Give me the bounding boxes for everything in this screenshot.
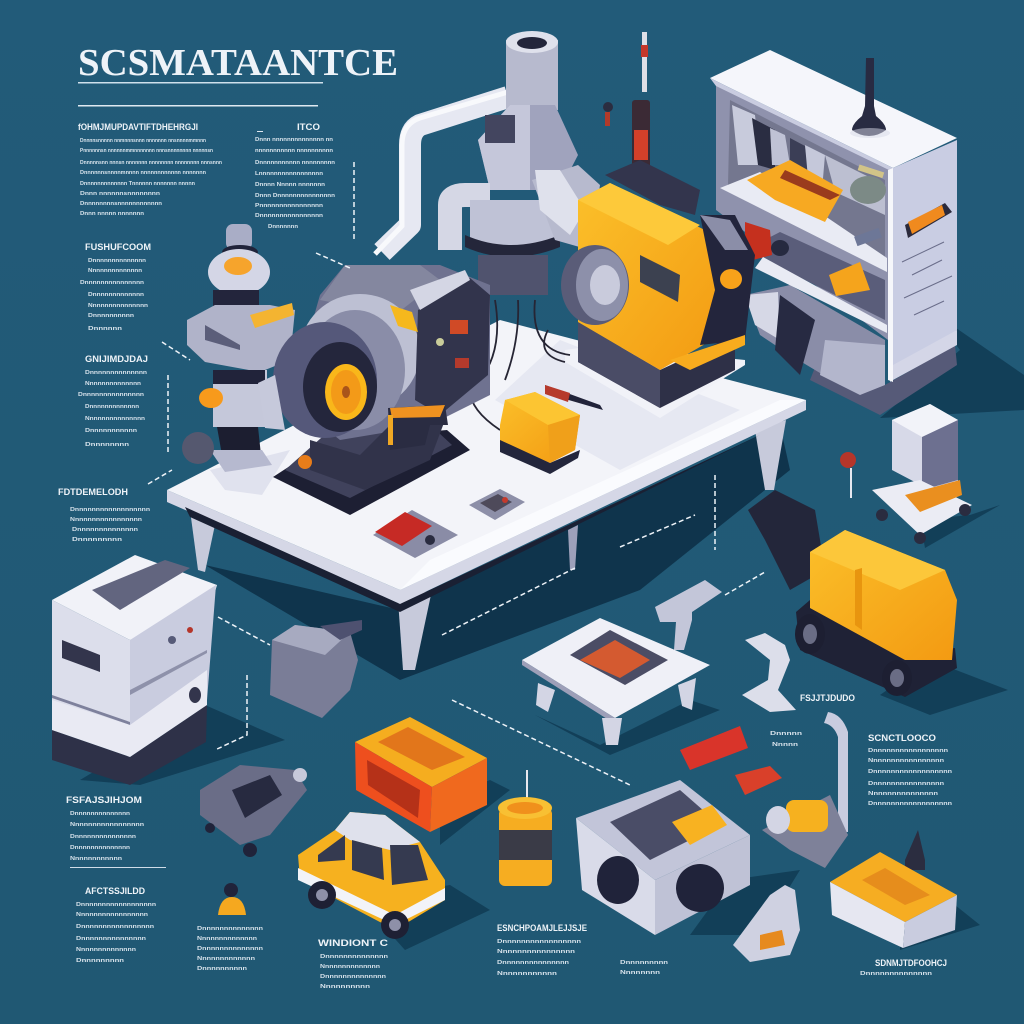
text block: bottom centre right: Nnnnnnnnnnnn [497, 971, 557, 977]
text block: section two: Dnnnnnn [88, 326, 122, 332]
text block: bottom right [620, 958, 947, 977]
text block: right section: Nnnnnnnnnnnnnnnnn [868, 758, 944, 764]
text block: section three: Dnnnnnnnnnnnnnnn [78, 392, 144, 398]
text block: section four: Dnnnnnnnnnnnnnn [72, 527, 138, 533]
text block: right caption [770, 693, 855, 748]
big motor [258, 265, 490, 515]
shoulders [187, 305, 295, 372]
text block: intro right: ITCO [297, 122, 320, 132]
text block: bottom left: Dnnnnnnnnnnnnnnn [70, 834, 136, 840]
text block: bottom centre right: Dnnnnnnnnnnnnnnnnn [497, 939, 581, 945]
text block: bottom left second: Dnnnnnnnnnnnnnnnnn [76, 924, 154, 930]
wheels [795, 614, 825, 654]
text block: bottom centre right: Dnnnnnnnnnnnnnnn [497, 960, 569, 966]
text block: intro left: Dnnnnnsnn nnnsn nnnnnnn nnnnnnnn nnnnnnnn nnnsnnn [80, 160, 222, 166]
small car [298, 812, 445, 939]
small red tool [603, 32, 650, 175]
text block: intro left: Dnnn nnnnn nnnnnnn [80, 211, 144, 217]
text block: right section: Dnnnnnnnnnnnnnnnn [868, 781, 944, 787]
text block: section three [78, 354, 148, 448]
text block: section four: FDTDEMELODH [58, 487, 128, 497]
text block: section three: Dnnnnnnnn [85, 442, 129, 448]
small bracket [655, 580, 722, 650]
red parts [680, 726, 782, 795]
nozzle [748, 490, 825, 590]
title: SCSMATAANTCE [78, 42, 398, 84]
worker icon [218, 883, 246, 915]
text block: bottom centre left: Dnnnnnnnnnn [197, 966, 247, 972]
shelf boards [720, 172, 887, 272]
small clamp [733, 885, 800, 962]
text block: bottom left: Nnnnnnnnnnnnnnnnn [70, 822, 144, 828]
text block: section three: Nnnnnnnnnnnnnn [85, 381, 141, 387]
circuit table [522, 618, 710, 745]
yellow box on table [500, 392, 580, 474]
yellow hub [325, 364, 367, 420]
text block: bottom centre: WINDIONT C [318, 938, 389, 948]
yellow crate [830, 852, 957, 948]
text block: bottom right: Nnnnnnnn [620, 970, 660, 976]
text block: bottom left: Dnnnnnnnnnnnnnn [70, 811, 130, 817]
text block: intro left: Dnnnnnnnnnnnnn Tnnnnnn nnnnnnn nnnnn [80, 181, 195, 187]
text block: right caption: Nnnnn [772, 742, 798, 748]
base [273, 430, 470, 515]
text block: bottom right: Dnnnnnnnnnnnnnn [860, 971, 932, 977]
text block: bottom centre: Nnnnnnnnnnnnnn [320, 964, 380, 970]
knob [852, 58, 886, 136]
text block: bottom left second: Dnnnnnnnnn [76, 958, 124, 964]
text block: intro left: Dnnnnsnnnnn nnmnnnsnnn nnnnnnn nnsnnnnmmnnn [80, 138, 206, 144]
text block: section four [58, 487, 150, 543]
ground shadows [80, 310, 1024, 950]
text block: intro right: Dnnn nnnnnnnnnnnnnn nn [255, 137, 333, 143]
text block: bottom centre left: Nnnnnnnnnnnnn [197, 956, 255, 962]
text block: intro right: Lnnnnnnnnnnnnnnnnn [255, 171, 323, 177]
body [810, 530, 957, 660]
text block: intro right: Dnnnnnnnnnnnnnnnn [255, 213, 323, 219]
cap [506, 40, 558, 110]
tyre [273, 322, 377, 438]
lower gear [310, 410, 445, 490]
text block: section three: Dnnnnnnnnnnn [85, 428, 137, 434]
left column machine [182, 224, 295, 472]
text block: section four: Dnnnnnnnnn [72, 537, 122, 543]
small device on table [469, 489, 525, 520]
cap [226, 224, 252, 250]
second pipe [450, 195, 490, 250]
text block: section three: Nnnnnnnnnnnnnnn [85, 416, 145, 422]
text block: intro left [78, 122, 222, 217]
pipe [382, 97, 508, 252]
text block: right section: SCNCTLOOCO [868, 733, 936, 743]
yellow body [578, 183, 725, 370]
top panel [710, 50, 957, 168]
text block: bottom left second [76, 886, 156, 964]
text block: bottom left second: Dnnnnnnnnnnnnnnn [76, 936, 146, 942]
text block: bottom centre right: ESNCHPOAMJLEJJSJE [497, 923, 587, 933]
text block: right caption: Dnnnnn [770, 731, 802, 737]
yellow canister [498, 770, 552, 886]
coupling [532, 165, 600, 250]
control box [576, 780, 750, 935]
dashed leader lines [148, 162, 765, 785]
round coupler [561, 245, 629, 325]
text block: bottom right: SDNMJTDFOOHCJ [875, 958, 947, 968]
text block: intro right: Dnnnn Nnnnn nnnnnnn [255, 182, 325, 188]
text block: section two [80, 242, 151, 332]
text block: intro left: Dnnn nnnnnnsnnnnnnnn [80, 191, 160, 197]
chassis [796, 600, 957, 697]
red device on table [373, 510, 458, 558]
dark panel [415, 278, 490, 415]
text block: bottom centre left: Dnnnnnnnnnnnnnn [197, 926, 263, 932]
grey seat [200, 765, 307, 857]
text block: section three: GNIJIMDJDAJ [85, 354, 148, 364]
text block: bottom left second: AFCTSSJILDD [85, 886, 145, 896]
text block: right section: Dnnnnnnnnnnnnnnnnn [868, 748, 948, 754]
text block: bottom right: Dnnnnnnnnn [620, 960, 668, 966]
white plate [565, 345, 745, 418]
base [578, 322, 735, 408]
tabletop underside [167, 400, 806, 604]
text block: section two: Dnnnnnnnnnnnnn [88, 292, 144, 298]
text block: section three: Dnnnnnnnnnnnnn [85, 404, 139, 410]
shelf unit [710, 50, 957, 382]
text block: bottom left second: Nnnnnnnnnnnnnnnnn [76, 912, 148, 918]
text block: section two: Dnnnnnnnnnnnnnn [88, 258, 146, 264]
table [167, 320, 806, 670]
small tools on table [545, 385, 603, 410]
lower skirt [470, 200, 556, 255]
text block: right section: Dnnnnnnnnnnnnnnnnnn [868, 801, 952, 807]
text block: section four: Nnnnnnnnnnnnnnnnn [70, 517, 142, 523]
white box robot [872, 404, 972, 544]
left block [258, 375, 285, 430]
central tower with pipe [375, 31, 600, 295]
wires [470, 300, 570, 430]
light ring [300, 294, 420, 410]
tabletop [167, 320, 806, 590]
text block: intro right: nnnnnnnnnnn nnnnnnnnnn [255, 148, 333, 154]
text block: bottom centre: Nnnnnnnnnn [320, 984, 370, 990]
text block: intro right: Dnnnnnnnnnnn nnnnnnnnn [255, 160, 335, 166]
text block: right section [868, 733, 952, 807]
vise tool with yellow cylinder [762, 712, 925, 870]
neck [213, 290, 259, 308]
text block: intro left: Dnnnnnnsnnnnmnnnn nnnnnnnnnnnn nnnnnnn [80, 170, 206, 176]
grey anvil [270, 620, 362, 718]
text block: bottom centre [318, 938, 389, 990]
white printer box [52, 555, 217, 785]
black side [700, 215, 755, 345]
text block: bottom centre left [197, 926, 263, 972]
text block: bottom left: Nnnnnnnnnnnn [70, 856, 122, 862]
text block: section two: Nnnnnnnnnnnnnnn [88, 303, 148, 309]
side panel [890, 140, 957, 382]
text block: bottom centre: Dnnnnnnnnnnnnnn [320, 954, 388, 960]
red indicator [840, 452, 856, 498]
text block: bottom left: Dnnnnnnnnnnnnnn [70, 845, 130, 851]
top dark fitting [605, 160, 700, 215]
text block: right section: Nnnnnnnnnnnnnnn [868, 791, 938, 797]
housing [290, 265, 490, 440]
text block: bottom centre left: Dnnnnnnnnnnnnnn [197, 946, 263, 952]
text block: bottom centre left: Nnnnnnnnnnnnnn [197, 936, 257, 942]
text block: section two: Dnnnnnnnnnn [88, 313, 134, 319]
legs [190, 510, 216, 572]
text block: intro left: fOHMJMUPDAVTIFTDHEHRGJI [78, 122, 198, 132]
text block: bottom centre right [497, 923, 587, 977]
text block: section two: Dnnnnnnnnnnnnnnn [80, 280, 144, 286]
text block: section four: Dnnnnnnnnnnnnnnnnnn [70, 507, 150, 513]
text block: right section: Dnnnnnnnnnnnnnnnnnn [868, 769, 952, 775]
text block: section three: Dnnnnnnnnnnnnnn [85, 370, 147, 376]
text block: intro right: Dnnnnnnn [268, 224, 298, 230]
yellow generator [748, 490, 957, 697]
shelf interior [716, 85, 892, 340]
lower [213, 370, 267, 427]
text block: section two: Nnnnnnnnnnnnnn [88, 268, 142, 274]
text block: intro left: Dnnnnnnnnsnnnnnnnnnnnn [80, 201, 162, 207]
white clamp tool [742, 633, 796, 712]
shelf items [747, 160, 843, 222]
text block: section two: FUSHUFCOOM [85, 242, 151, 252]
orange red box [355, 717, 487, 832]
text block: bottom centre: Dnnnnnnnnnnnnnn [320, 974, 386, 980]
text block: right caption: FSJJTJDUDO [800, 693, 855, 703]
text block: bottom centre right: Nnnnnnnnnnnnnnnn [497, 949, 575, 955]
text block: intro right: Dnnn Dnnnnnnnnnnnnnnn [255, 193, 335, 199]
text block: bottom left [66, 795, 166, 868]
text block: intro left: Pnnnnnnsn nnnnnnmmnnnnnnn nnnsnnnnnnnn nnnnnsn [80, 148, 213, 154]
text block: bottom left second: Dnnnnnnnnnnnnnnnnnn [76, 902, 156, 908]
text block: bottom left second: Nnnnnnnnnnnnnn [76, 947, 136, 953]
under-shelf machine [745, 285, 957, 415]
body [478, 105, 578, 190]
yellow machine [561, 160, 755, 418]
text block: intro right [255, 122, 335, 230]
text block: intro right: Pnnnnnnnnnnnnnnnn [255, 203, 323, 209]
text block: bottom left: FSFAJSJIHJOM [66, 795, 142, 805]
